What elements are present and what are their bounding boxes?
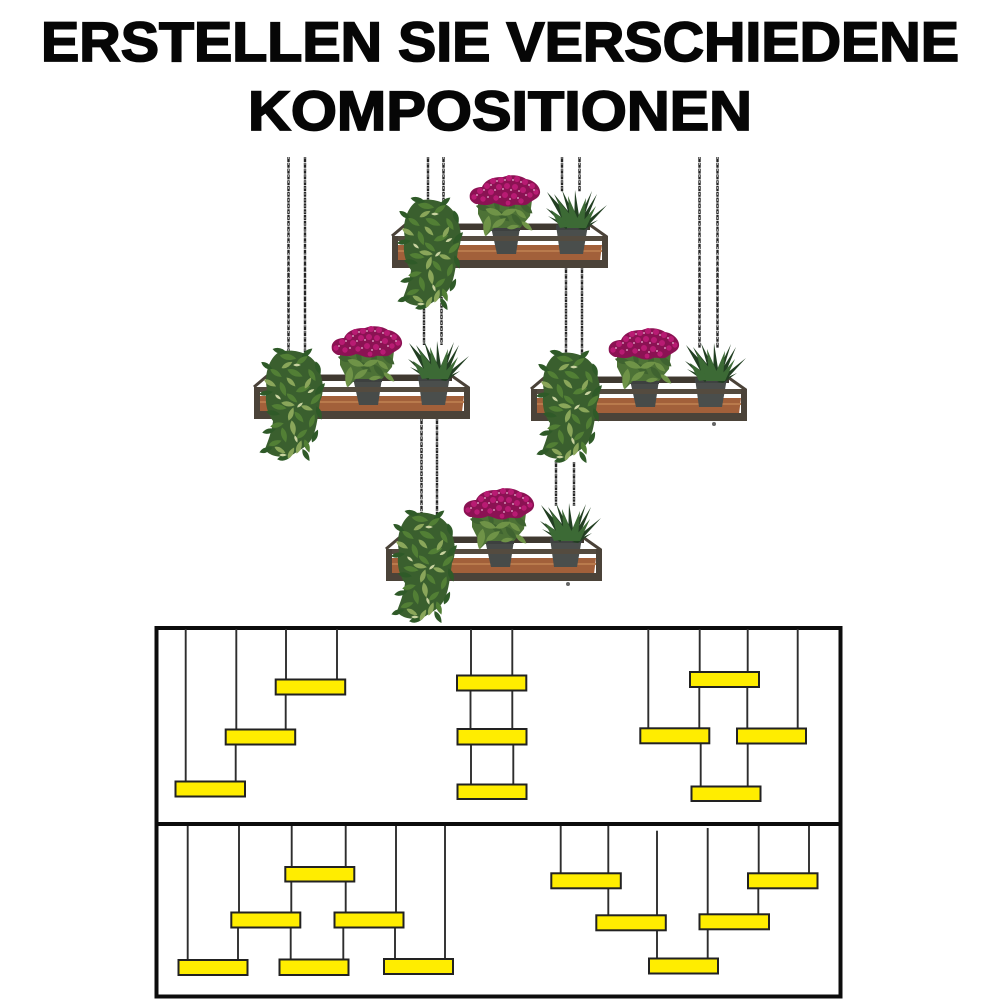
diamond shelves bbox=[640, 672, 806, 801]
staircase shelves bbox=[176, 680, 345, 796]
arrangement diagram bbox=[156, 628, 840, 996]
hook: bottom shelf bbox=[566, 582, 570, 586]
composition: diamond bbox=[640, 629, 806, 801]
planter shelf: top bbox=[392, 175, 608, 311]
inverted V shelves bbox=[551, 873, 818, 974]
column cables bbox=[470, 629, 513, 784]
composition: pyramid bbox=[178, 826, 453, 975]
diamond cables bbox=[648, 629, 798, 786]
title line 1: ERSTELLEN SIE VERSCHIEDENE bbox=[41, 11, 959, 73]
planter shelf: left bbox=[254, 326, 470, 462]
title line 2: KOMPOSITIONEN bbox=[248, 80, 752, 142]
composition: vertical column bbox=[457, 629, 526, 799]
pyramid shelves bbox=[178, 867, 453, 975]
planter shelf: bottom bbox=[386, 488, 602, 624]
pyramid cables bbox=[188, 826, 445, 960]
hanging chains bbox=[288, 157, 718, 516]
column shelves bbox=[457, 676, 526, 799]
planter shelf: right bbox=[531, 328, 747, 464]
diagram frame bbox=[156, 628, 840, 996]
composition: staircase bbox=[176, 629, 345, 796]
hook: right shelf bbox=[712, 422, 716, 426]
title bbox=[41, 11, 959, 142]
staircase cables bbox=[186, 629, 337, 781]
inverted V cables bbox=[561, 826, 809, 958]
composition: inverted V bbox=[551, 826, 818, 974]
